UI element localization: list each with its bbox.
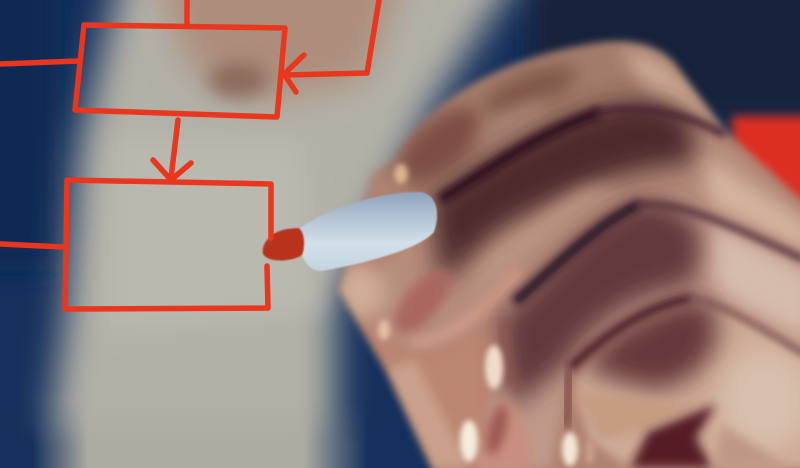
flowchart box: top: [75, 25, 285, 117]
connector: left to top box: [0, 61, 78, 64]
palm and lower left: [378, 336, 491, 432]
marker pen: [263, 192, 437, 271]
finger: middle: [375, 100, 800, 355]
fingernail highlights: [378, 164, 595, 466]
finger: index: [384, 44, 713, 196]
finger: little: [575, 297, 800, 468]
arrow: right into top box: [284, 0, 379, 92]
hand: [330, 30, 800, 468]
flowchart drawing: [0, 0, 379, 309]
flowchart box: bottom: [65, 180, 271, 309]
connector: top stub: [184, 0, 190, 24]
finger creases: [440, 112, 600, 200]
shadow wedge under little finger: [630, 404, 716, 468]
pen tip: [263, 228, 304, 260]
pen body: [299, 192, 437, 271]
arrow: top box down to bottom box: [153, 120, 191, 180]
finger: ring: [475, 200, 800, 468]
connector: left to bottom box: [0, 244, 64, 247]
